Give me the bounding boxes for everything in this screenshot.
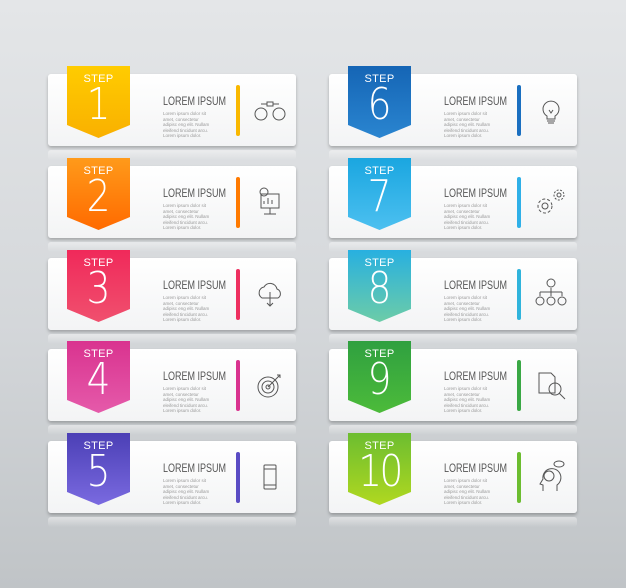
icon 8: [536, 278, 566, 306]
icon 4: [258, 374, 280, 398]
card 7: [329, 166, 577, 238]
card 9: STEP: [365, 348, 394, 360]
card 10: [329, 441, 577, 513]
card 3: 3: [87, 263, 110, 314]
card 10: Lorem ipsum dolor sit amet, consectetur adipisc eng elit. Nullam eleifend tincidunt arcu. Lorem ipsum dolor.: [444, 478, 490, 505]
card 7: STEP: [365, 165, 394, 177]
icon 5: [264, 464, 276, 490]
icon 3: [258, 282, 281, 307]
card 9: 9: [368, 354, 391, 405]
card 4: STEP: [84, 348, 113, 360]
card 7: LOREM IPSUM: [444, 186, 507, 200]
card 6: Lorem ipsum dolor sit amet, consectetur adipisc eng elit. Nullam eleifend tincidunt arcu. Lorem ipsum dolor.: [444, 111, 490, 138]
card 9: [329, 349, 577, 421]
card 8: STEP: [365, 257, 394, 269]
card 2: LOREM IPSUM: [163, 186, 226, 200]
card 10: LOREM IPSUM: [444, 461, 507, 475]
card 4: Lorem ipsum dolor sit amet, consectetur adipisc eng elit. Nullam eleifend tincidunt arcu. Lorem ipsum dolor.: [163, 386, 209, 413]
card 8: Lorem ipsum dolor sit amet, consectetur adipisc eng elit. Nullam eleifend tincidunt arcu. Lorem ipsum dolor.: [444, 295, 490, 322]
card 9: LOREM IPSUM: [444, 369, 507, 383]
card 7: Lorem ipsum dolor sit amet, consectetur adipisc eng elit. Nullam eleifend tincidunt arcu. Lorem ipsum dolor.: [444, 203, 490, 230]
ribbon 1: STEP: [84, 73, 113, 85]
icon 1: [254, 102, 286, 120]
card 5: LOREM IPSUM: [163, 461, 226, 475]
card 6: LOREM IPSUM: [444, 94, 507, 108]
icon 10: [539, 460, 564, 491]
icon 9: [538, 372, 566, 400]
card 1: [48, 74, 296, 146]
card 8: 8: [368, 263, 391, 314]
card 4: LOREM IPSUM: [163, 369, 226, 383]
card 1: LOREM IPSUM: [163, 94, 226, 108]
card 6: [329, 74, 577, 146]
card 3: Lorem ipsum dolor sit amet, consectetur adipisc eng elit. Nullam eleifend tincidunt arcu. Lorem ipsum dolor.: [163, 295, 209, 322]
icon 2: [260, 188, 280, 214]
card 10: 10: [358, 446, 401, 497]
card 2: Lorem ipsum dolor sit amet, consectetur adipisc eng elit. Nullam eleifend tincidunt arcu. Lorem ipsum dolor.: [163, 203, 209, 230]
card 7: 7: [368, 171, 391, 222]
card 5: [48, 441, 296, 513]
card 5: STEP: [84, 440, 113, 452]
card 6: 6: [368, 79, 391, 130]
ribbon 1: [67, 66, 130, 138]
card 5: Lorem ipsum dolor sit amet, consectetur adipisc eng elit. Nullam eleifend tincidunt arcu. Lorem ipsum dolor.: [163, 478, 209, 505]
card 2: STEP: [84, 165, 113, 177]
card 3: STEP: [84, 257, 113, 269]
card 10: STEP: [365, 440, 394, 452]
card 1: Lorem ipsum dolor sit amet, consectetur adipisc eng elit. Nullam eleifend tincidunt arcu. Lorem ipsum dolor.: [163, 111, 209, 138]
card 4: [48, 349, 296, 421]
card 9: Lorem ipsum dolor sit amet, consectetur adipisc eng elit. Nullam eleifend tincidunt arcu. Lorem ipsum dolor.: [444, 386, 490, 413]
card 8: [329, 258, 577, 330]
icon 7: [538, 190, 564, 214]
card 8: LOREM IPSUM: [444, 278, 507, 292]
card 2: 2: [87, 171, 110, 222]
card 3: LOREM IPSUM: [163, 278, 226, 292]
card 3: [48, 258, 296, 330]
ribbon 1: 1: [87, 79, 110, 130]
icon 6: [542, 100, 560, 124]
card 6: STEP: [365, 73, 394, 85]
card 4: 4: [87, 354, 110, 405]
card 5: 5: [87, 446, 110, 497]
card 2: [48, 166, 296, 238]
